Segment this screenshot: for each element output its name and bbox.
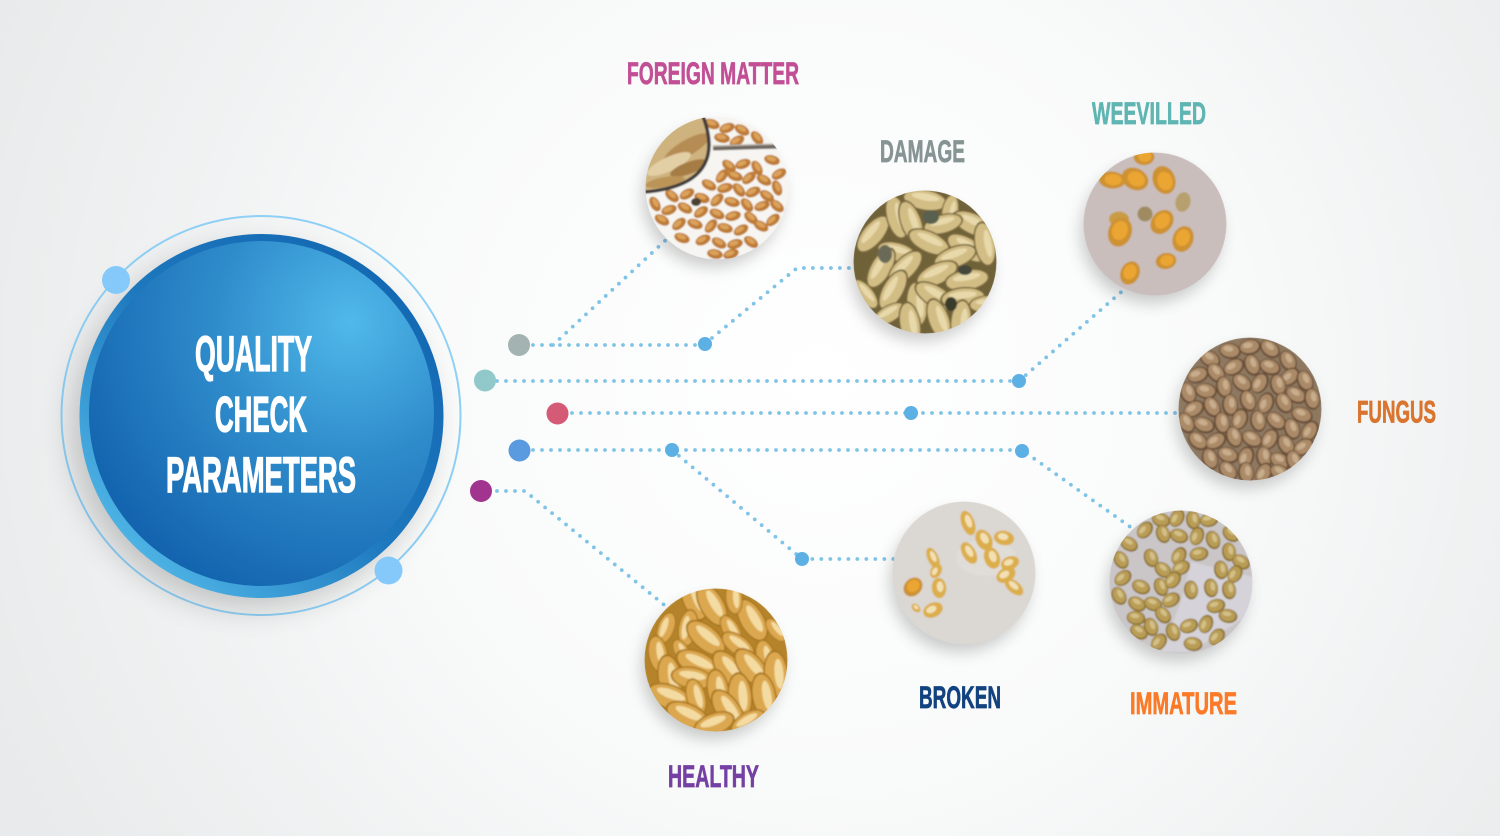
ring node bottom right <box>374 556 402 584</box>
junction dots <box>665 337 1029 566</box>
photo: healthy <box>642 571 791 742</box>
connector: weevilled line <box>497 287 1127 381</box>
label: healthy: HEALTHY <box>668 758 759 794</box>
node: blue <box>508 440 530 462</box>
outer ring <box>62 216 460 615</box>
node: gray <box>508 334 530 356</box>
connector: fungus line <box>572 411 1326 415</box>
main circle: quality check parameters <box>62 216 460 615</box>
label: damage: DAMAGE <box>880 133 965 169</box>
label: fungus: FUNGUS <box>1357 394 1436 430</box>
rim disc <box>80 234 444 598</box>
photo: damage <box>846 185 1006 349</box>
node: teal <box>474 370 496 392</box>
label: foreign matter: FOREIGN MATTER <box>627 55 799 91</box>
photo: immature <box>1107 506 1253 661</box>
label: immature: IMMATURE <box>1130 685 1237 721</box>
photo: foreign matter <box>643 116 789 267</box>
main title: QUALITY <box>195 326 312 382</box>
node: purple <box>470 480 492 502</box>
connector: foreign matter and damage lines <box>533 238 858 345</box>
connector: broken line <box>672 450 895 559</box>
ring node top left <box>102 266 130 294</box>
node: red <box>546 402 568 424</box>
label: weevilled: WEEVILLED <box>1092 95 1206 131</box>
inner disc <box>89 241 434 586</box>
main title: CHECK <box>215 386 307 442</box>
main title <box>166 326 356 503</box>
photo: weevilled <box>1081 149 1227 303</box>
connector: immature line <box>533 450 1136 531</box>
photo: fungus <box>1174 336 1322 488</box>
label: broken: BROKEN <box>919 679 1001 715</box>
photo: broken <box>890 501 1036 652</box>
connector: healthy line <box>497 491 668 608</box>
main title: PARAMETERS <box>166 447 356 503</box>
